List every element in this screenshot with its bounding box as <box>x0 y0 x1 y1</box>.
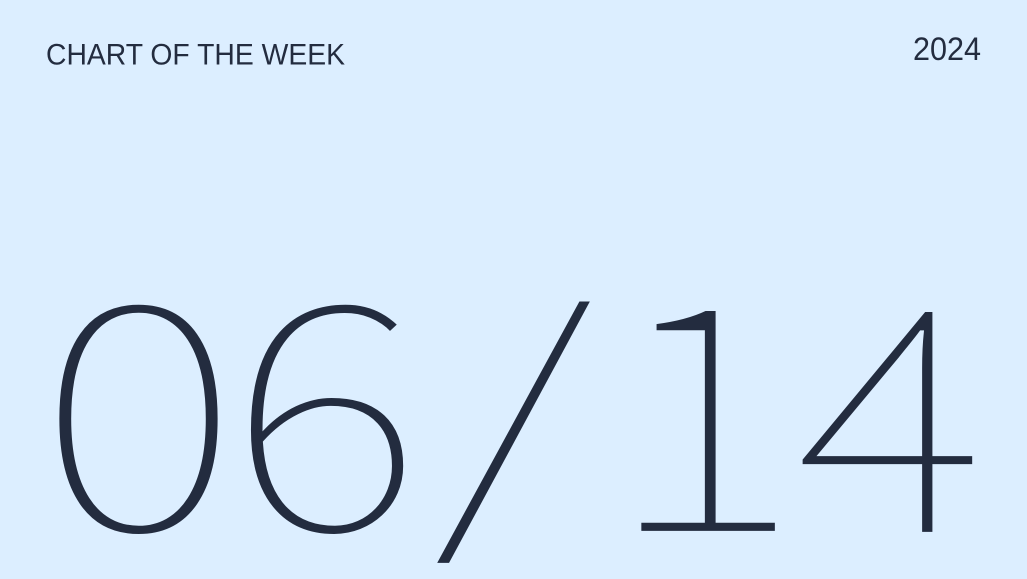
date <box>37 163 986 579</box>
title: CHART OF THE WEEK <box>46 38 345 72</box>
year: 2024 <box>913 31 981 67</box>
